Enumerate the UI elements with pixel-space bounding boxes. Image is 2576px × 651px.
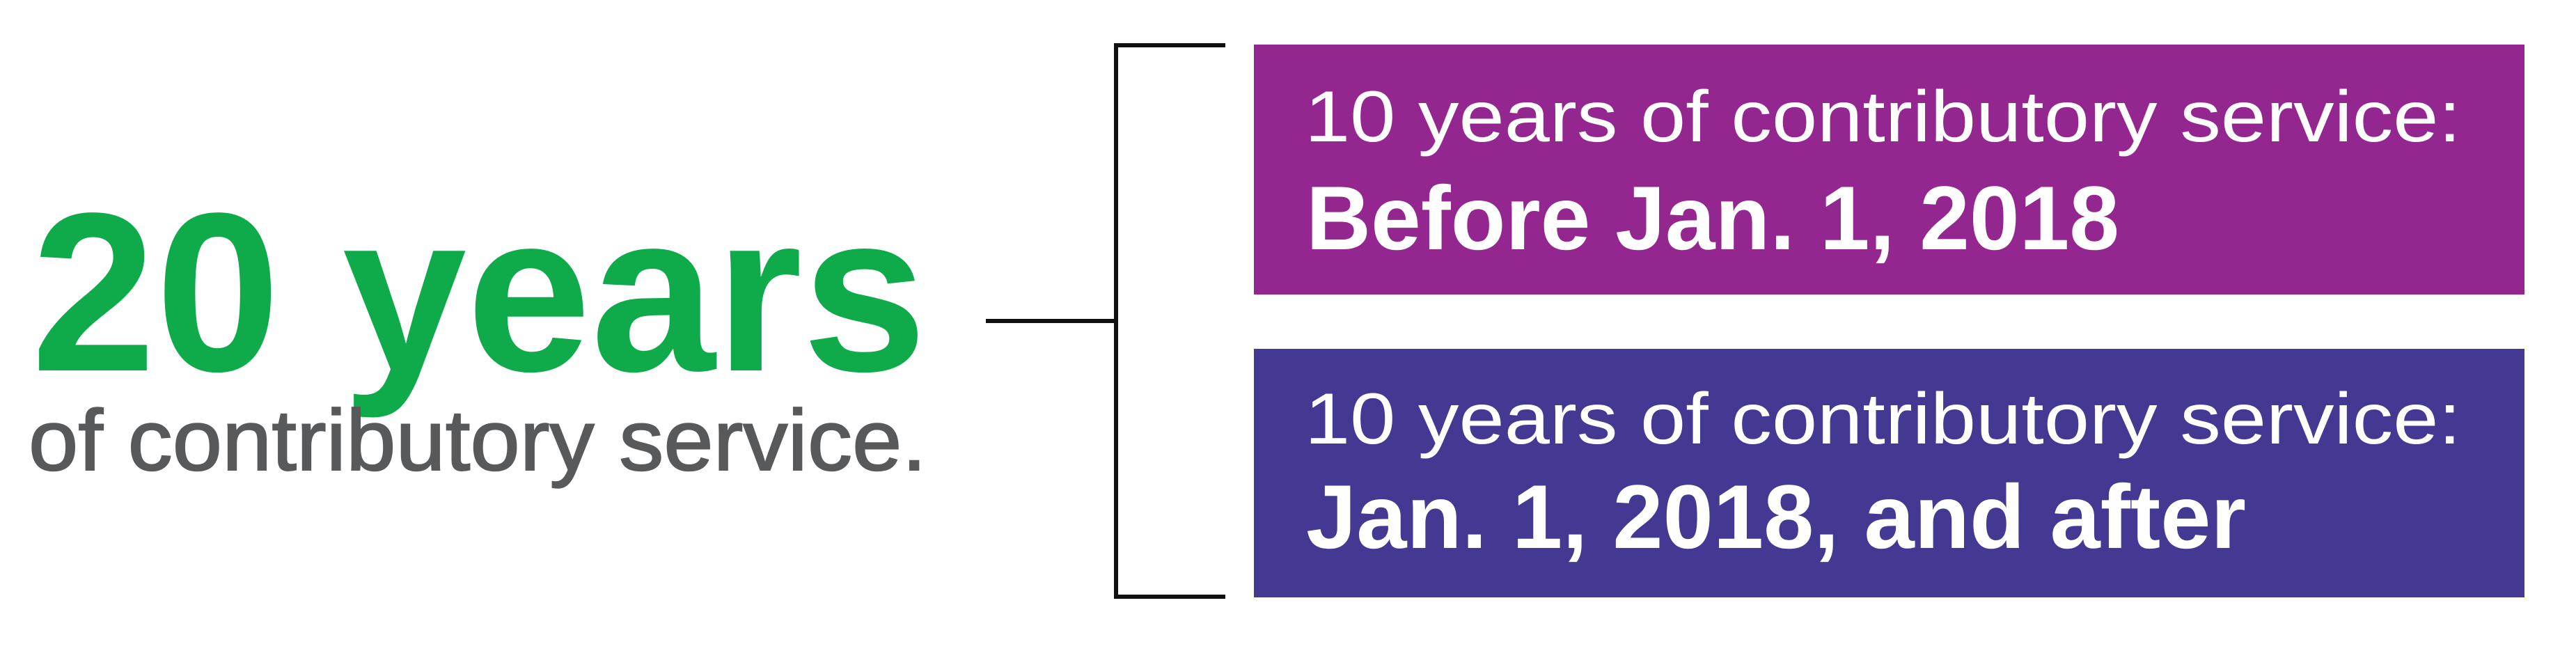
panel: before Jan 1 2018: Before Jan. 1, 2018	[1306, 167, 2119, 269]
panel: Jan 1 2018 and after: Jan. 1, 2018, and after	[1306, 466, 2246, 567]
headline: 20 years: 20 years	[31, 166, 927, 420]
panel: before Jan 1 2018: 10 years of contributory service:	[1305, 77, 2461, 157]
panel: before Jan 1 2018	[1254, 45, 2524, 295]
subheading: of contributory service.: of contributory service.	[29, 393, 927, 489]
bracket connector	[986, 45, 1225, 597]
panel: Jan 1 2018 and after: 10 years of contributory service:	[1305, 379, 2461, 460]
panel: Jan 1 2018 and after	[1254, 349, 2524, 597]
